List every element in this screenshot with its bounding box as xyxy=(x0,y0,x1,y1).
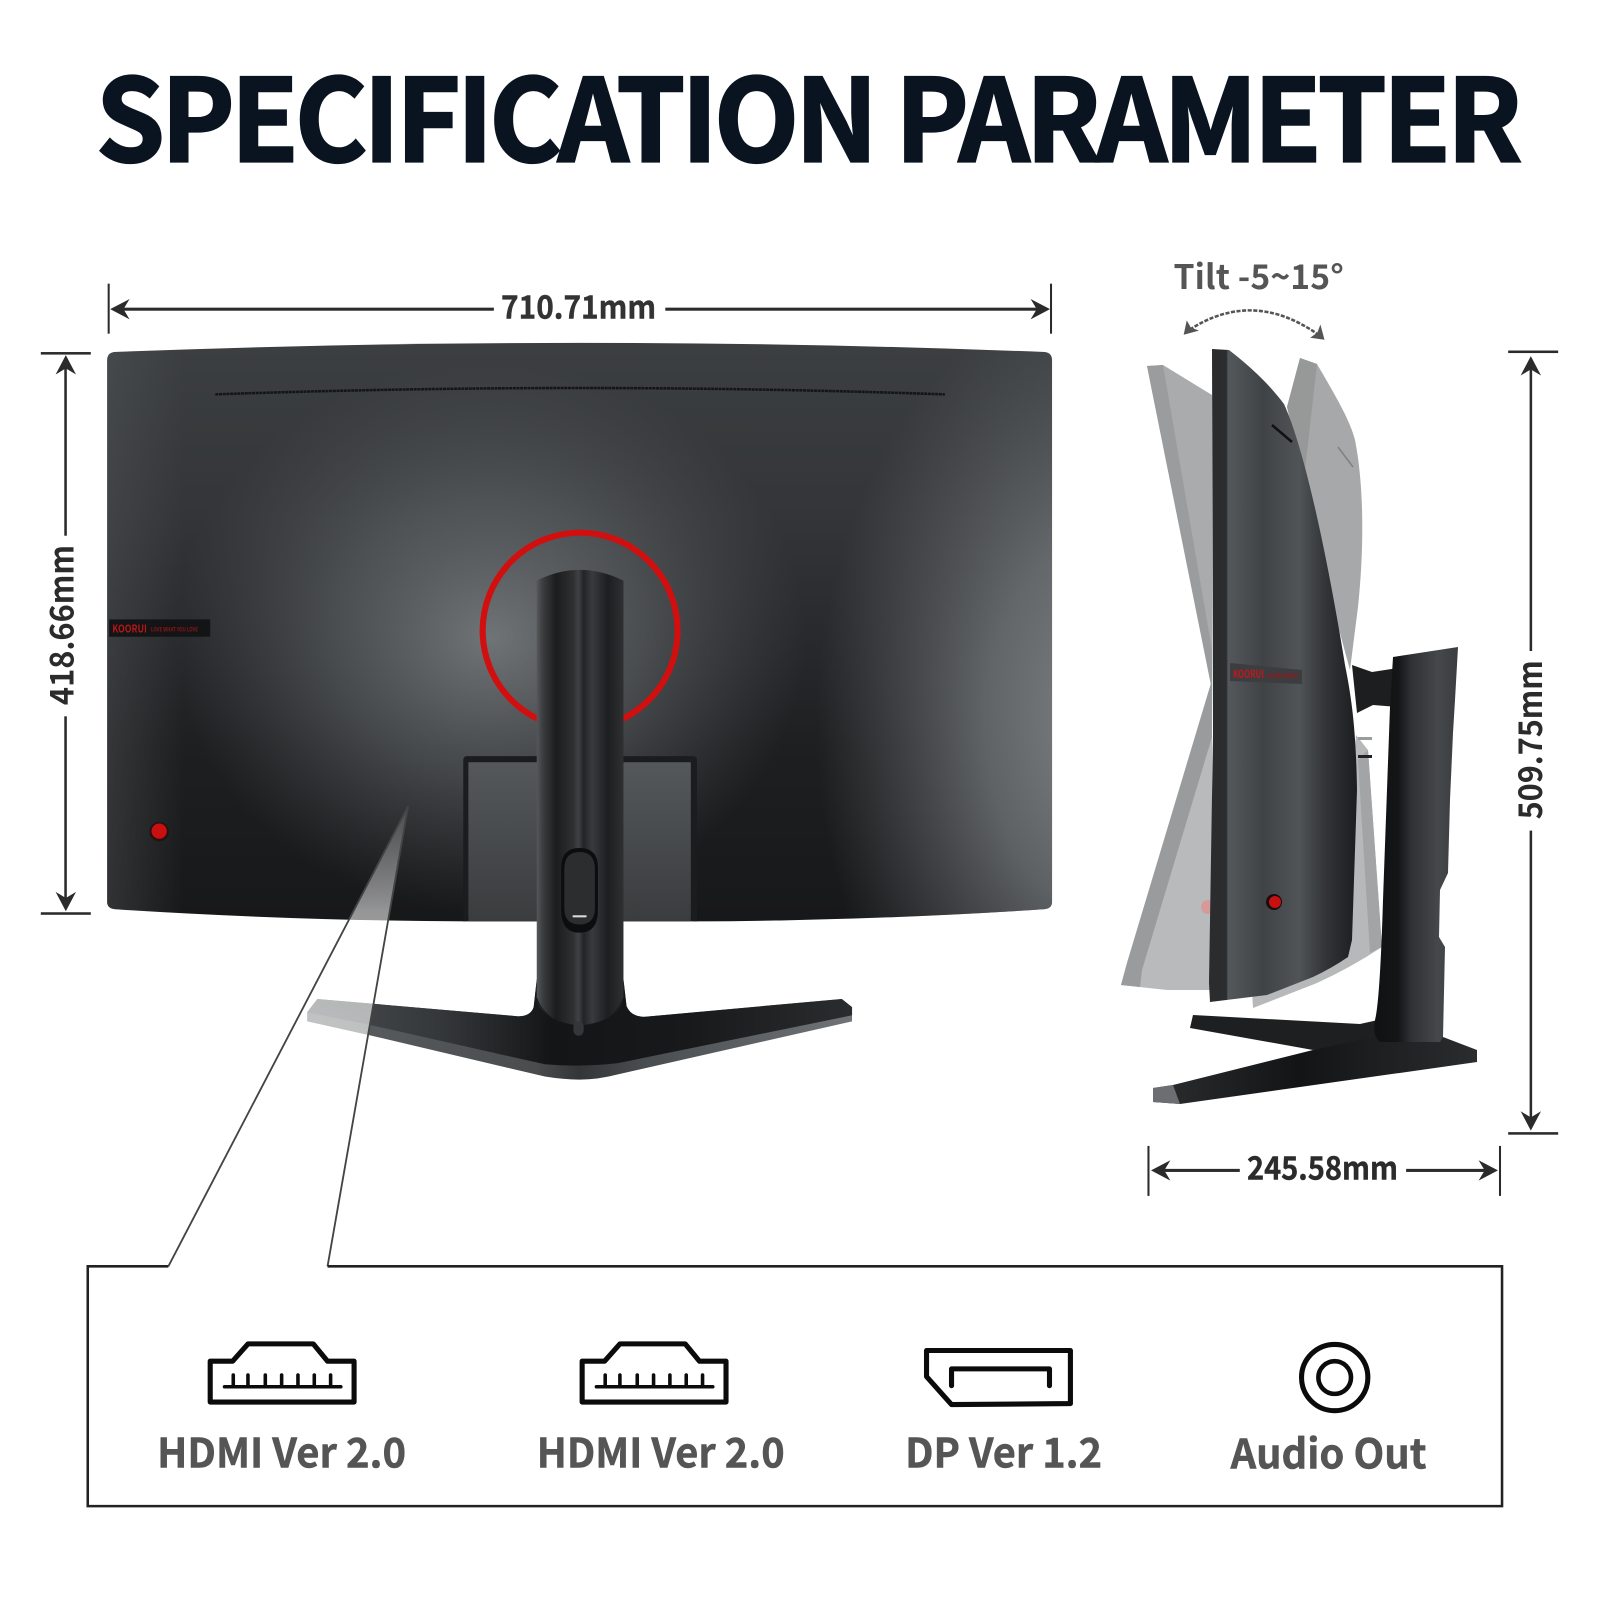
ghost: tilted back upper left xyxy=(1147,365,1212,690)
stand neck xyxy=(537,570,623,1036)
stand arm xyxy=(1352,665,1398,713)
dimension: depth 245.58mm: 245.58mm xyxy=(1247,1144,1398,1190)
stand post xyxy=(1374,647,1458,1042)
vent slot xyxy=(215,388,945,394)
side red button xyxy=(1266,894,1282,910)
side brand label xyxy=(1230,663,1302,684)
title: SPECIFICATION PARAMETER xyxy=(96,29,1520,195)
brand label xyxy=(109,619,210,637)
stand base front view xyxy=(307,980,852,1080)
icon: HDMI port 1 xyxy=(210,1344,354,1402)
label: HDMI 1: HDMI Ver 2.0 xyxy=(157,1420,406,1479)
dimension: height 509.75mm xyxy=(1505,351,1558,1135)
side base xyxy=(1153,1015,1477,1104)
ghost: tilted upper right xyxy=(1287,358,1362,670)
VESA block xyxy=(463,756,697,921)
side brand label: LOVE WHAT xyxy=(1267,671,1298,680)
icon: HDMI port 2 xyxy=(582,1344,726,1402)
red ring highlight xyxy=(483,533,678,729)
brand label: LOVE WHAT YOU LOVE xyxy=(151,625,198,634)
label: HDMI 2: HDMI Ver 2.0 xyxy=(537,1420,785,1479)
brand label: KOORUI xyxy=(112,622,147,637)
dimension: width 710.71mm xyxy=(108,282,1052,334)
cable management cutout xyxy=(561,848,598,933)
monitor rear view xyxy=(107,343,1052,921)
main side panel xyxy=(1209,349,1357,1002)
red power button xyxy=(149,822,169,841)
dimension: width 710.71mm: 710.71mm xyxy=(501,282,656,328)
ghost: tilted lower right xyxy=(1252,735,1382,1008)
ghost: tilted lower left xyxy=(1121,680,1215,990)
dimension: height 418.66mm: 418.66mm xyxy=(36,545,83,705)
dimension: height 509.75mm: 509.75mm xyxy=(1505,660,1552,819)
callout beam xyxy=(168,806,408,1266)
ports callout box xyxy=(88,1266,1502,1506)
monitor side view xyxy=(1121,349,1477,1104)
dimension: depth 245.58mm xyxy=(1147,1144,1501,1196)
label: DisplayPort: DP Ver 1.2 xyxy=(905,1420,1102,1479)
label: Audio Out: Audio Out xyxy=(1230,1421,1427,1480)
dimension: height 418.66mm xyxy=(36,352,91,915)
icon: audio jack xyxy=(1302,1344,1368,1411)
tilt arrow xyxy=(1184,310,1324,340)
tilt label: Tilt -5~15° xyxy=(1173,250,1344,299)
icon: DisplayPort xyxy=(927,1351,1070,1405)
side brand label: KOORUI xyxy=(1233,666,1264,682)
